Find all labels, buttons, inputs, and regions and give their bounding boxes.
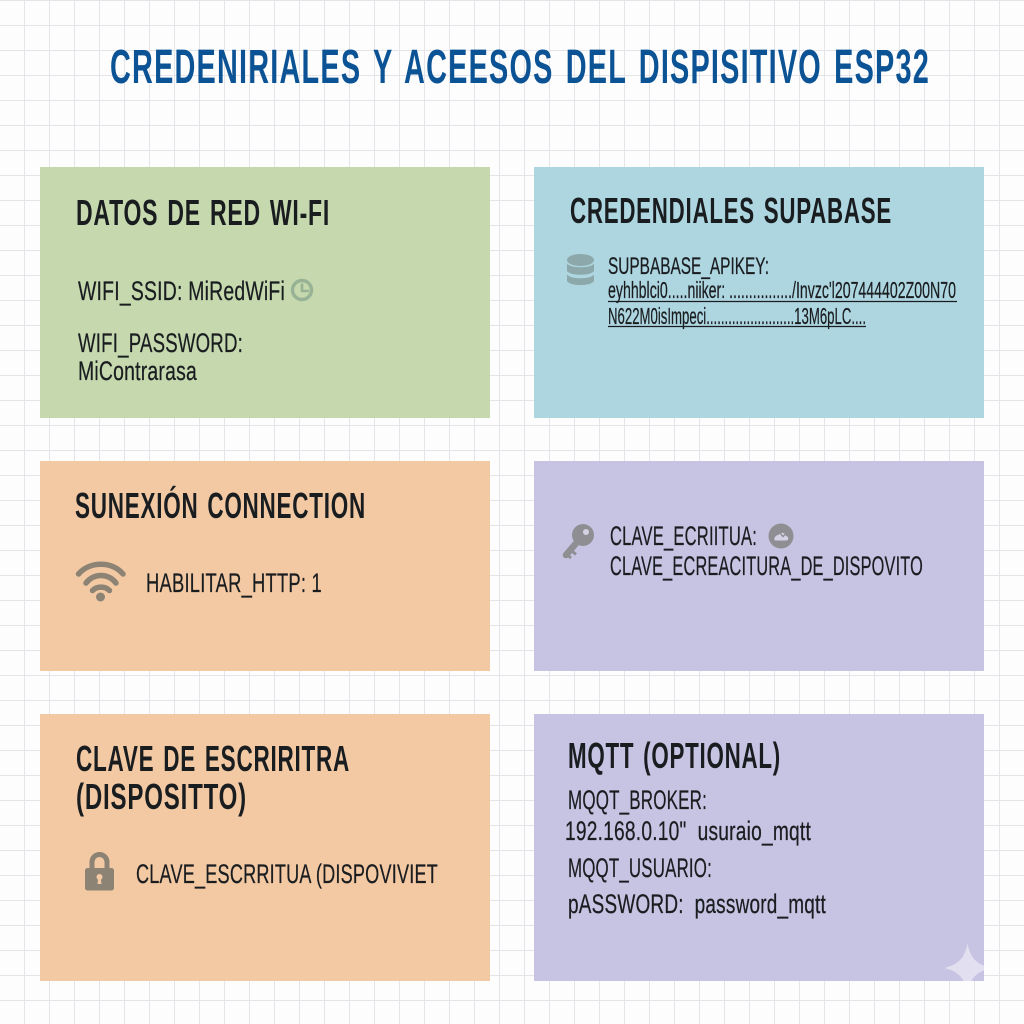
panel: clave de escritura dispositivo bbox=[40, 714, 490, 981]
panel: mqtt bbox=[534, 714, 992, 993]
heading: datos de red: DATOS DE RED WI-FI bbox=[76, 192, 330, 233]
text: mqtt broker: MQQT_BROKER: bbox=[568, 785, 707, 815]
icon: wifi bbox=[78, 564, 123, 602]
text: mqtt broker bbox=[565, 785, 811, 846]
icon: key bbox=[566, 524, 594, 558]
text: mqtt usuario: MQQT_USUARIO: bbox=[568, 853, 712, 883]
text: clave escritura value: CLAVE_ESCRRITUA (DISPOVIVIET bbox=[136, 859, 438, 889]
text: mqtt password: pASSWORD: password_mqtt bbox=[568, 889, 826, 919]
text: mqtt broker: 192.168.0.10" usuraio_mqtt bbox=[565, 816, 811, 846]
icon: padlock bbox=[85, 855, 114, 890]
text: wifi password: WIFI_PASSWORD: bbox=[78, 328, 243, 358]
panel: datos de red wi-fi bbox=[40, 167, 490, 418]
panel: conexion bbox=[40, 461, 490, 671]
text: wifi password bbox=[78, 328, 243, 386]
heading: sunexion connection: SUNEXIÓN CONNECTION bbox=[75, 484, 366, 526]
heading: clave de escritura: (DISPOSITTO) bbox=[76, 776, 247, 817]
text: clave label: CLAVE_ECRIITUA: bbox=[610, 521, 757, 551]
text: wifi password: MiContrarasa bbox=[78, 356, 197, 386]
icon: clock bbox=[292, 280, 312, 300]
heading: mqtt optional: MQTT (OPTIONAL) bbox=[568, 735, 781, 776]
icon: sparkle bbox=[944, 944, 984, 981]
icon: cloud badge bbox=[768, 524, 794, 548]
text: api key value bbox=[608, 277, 957, 329]
heading: clave de escritura bbox=[76, 738, 350, 817]
text: api key label: SUPBABASE_APIKEY: bbox=[608, 253, 769, 280]
text: wifi ssid: WIFI_SSID: MiRedWiFi bbox=[78, 276, 285, 306]
text: habilitar http: HABILITAR_HTTP: 1 bbox=[146, 568, 322, 598]
panel: credenciales supabase bbox=[534, 167, 984, 418]
heading: clave de escritura: CLAVE DE ESCRIRITRA bbox=[76, 738, 350, 779]
icon: database bbox=[567, 254, 594, 285]
panel: clave escritura bbox=[534, 461, 984, 671]
